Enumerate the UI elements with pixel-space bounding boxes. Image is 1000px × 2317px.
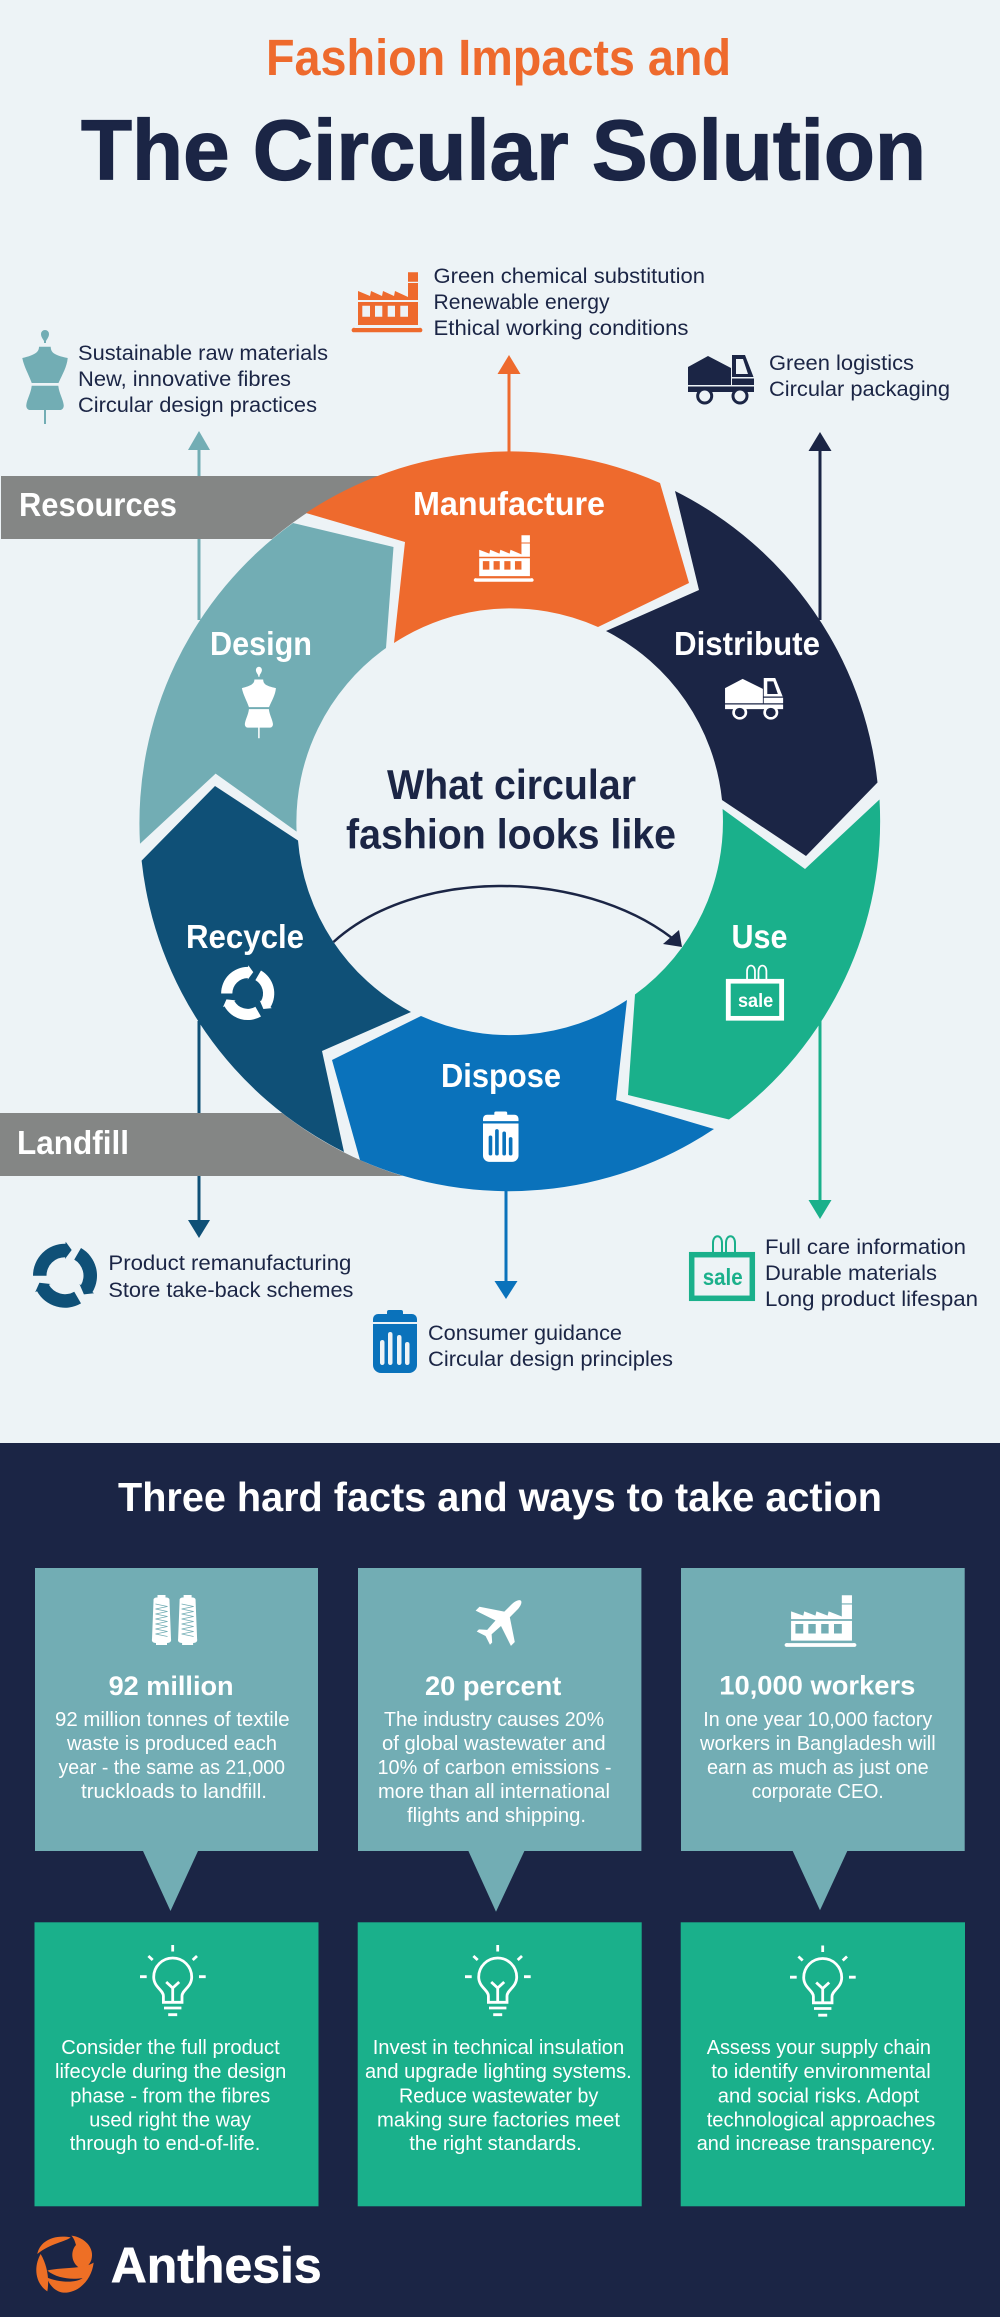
action card 3 <box>681 1922 965 2206</box>
segment: distribute: Distribute <box>674 625 820 662</box>
segment: recycle <box>142 786 411 1152</box>
fact card: 92 million: truckloads to landfill. <box>81 1780 267 1803</box>
segment: design <box>139 523 394 844</box>
fact card: 20 percent: flights and shipping. <box>407 1804 586 1827</box>
landfill bar: Landfill <box>17 1124 129 1161</box>
fact card: 20 percent: 10% of carbon emissions - <box>378 1756 612 1779</box>
fact card: 10,000 workers: workers in Bangladesh will <box>699 1732 936 1755</box>
segment: manufacture: Manufacture <box>413 485 605 522</box>
action card 1: lifecycle during the design <box>55 2060 286 2083</box>
manufacture callout: Ethical working conditions <box>434 317 688 340</box>
action card 2: the right standards. <box>409 2132 582 2155</box>
action card 2: and upgrade lighting systems. <box>365 2060 632 2083</box>
action card 1: Consider the full product <box>61 2036 280 2059</box>
distribute callout: Circular packaging <box>769 378 950 401</box>
fact card: 20 percent <box>358 1568 641 1912</box>
icon: factory <box>785 1595 856 1647</box>
fact card: 20 percent: 20 percent <box>425 1671 561 1701</box>
segment: manufacture <box>306 451 689 643</box>
arrow: recycle down <box>188 1021 210 1238</box>
icon: sale bag: sale <box>703 1264 743 1290</box>
arrow: manufacture up <box>498 355 520 454</box>
segment: dispose <box>332 1000 714 1191</box>
manufacture callout <box>352 265 705 340</box>
action card 3: and increase transparency. <box>697 2132 936 2155</box>
action card 3: and social risks. Adopt <box>718 2084 920 2107</box>
segment: dispose: Dispose <box>441 1057 561 1094</box>
recycle callout <box>32 1242 353 1320</box>
icon: lightbulb <box>140 1945 206 2015</box>
segment: distribute <box>606 491 878 856</box>
panel: hard facts <box>0 1443 1000 2317</box>
action card 3: Assess your supply chain <box>707 2036 931 2059</box>
action card 2: Invest in technical insulation <box>373 2036 624 2059</box>
fact card: 20 percent: of global wastewater and <box>382 1732 606 1755</box>
use callout: Long product lifespan <box>765 1288 978 1311</box>
arrow: use down <box>808 1021 832 1219</box>
action card 1: phase - from the fibres <box>70 2084 270 2107</box>
title: The Circular Solution <box>81 104 926 198</box>
action card 2: making sure factories meet <box>377 2108 620 2131</box>
segment: use <box>628 800 880 1120</box>
logo: anthesis: Anthesis <box>111 2236 322 2293</box>
fact card: 20 percent: The industry causes 20% <box>384 1708 604 1731</box>
use callout <box>692 1236 978 1311</box>
dispose callout <box>373 1310 673 1373</box>
icon: mannequin <box>22 330 68 424</box>
resources bar <box>1 476 379 539</box>
icon: leaf swirl <box>36 2236 94 2293</box>
design callout: New, innovative fibres <box>78 368 291 391</box>
recycle callout: Product remanufacturing <box>108 1252 351 1275</box>
fact card: 92 million: waste is produced each <box>66 1732 277 1755</box>
action card 3: technological approaches <box>707 2108 935 2131</box>
landfill bar <box>0 1113 403 1176</box>
distribute callout <box>688 352 950 403</box>
centre heading: What circular <box>387 761 636 808</box>
action card 1: through to end-of-life. <box>70 2132 260 2155</box>
action card 1: used right the way <box>89 2108 252 2131</box>
fact card: 10,000 workers: In one year 10,000 factory <box>703 1708 933 1731</box>
fact card: 10,000 workers: 10,000 workers <box>719 1670 915 1700</box>
distribute callout: Green logistics <box>769 352 914 375</box>
design callout: Circular design practices <box>78 394 317 417</box>
icon: truck <box>688 355 754 403</box>
icon: recycle <box>32 1242 110 1320</box>
fact card: 20 percent: more than all international <box>378 1780 610 1803</box>
centre heading: fashion looks like <box>346 811 676 858</box>
icon: lightbulb <box>465 1945 531 2015</box>
recycle callout: Store take-back schemes <box>108 1279 353 1302</box>
segment: design: Design <box>210 625 312 662</box>
use callout: Durable materials <box>765 1262 937 1285</box>
segment: use: sale <box>738 990 773 1012</box>
heading: three hard facts: Three hard facts and ways to take action <box>118 1474 882 1520</box>
arrow: dispose down <box>494 1190 518 1299</box>
segment: use: Use <box>732 918 788 955</box>
action card 3: to identify environmental <box>711 2060 931 2083</box>
icon: bin <box>373 1310 417 1373</box>
action card 2: Reduce wastewater by <box>399 2084 599 2107</box>
fact card: 92 million: 92 million tonnes of textile <box>55 1708 290 1731</box>
action card 2 <box>358 1922 642 2206</box>
arrow: recycle to use loop <box>334 886 682 947</box>
dispose callout: Circular design principles <box>428 1348 673 1371</box>
icon: thread spools <box>152 1595 197 1645</box>
fact card: 92 million: year - the same as 21,000 <box>58 1756 285 1779</box>
manufacture callout: Renewable energy <box>434 291 610 314</box>
dispose callout: Consumer guidance <box>428 1322 622 1345</box>
segment: recycle: Recycle <box>186 918 304 955</box>
use callout: Full care information <box>765 1236 966 1259</box>
icon: factory <box>352 272 422 332</box>
resources bar: Resources <box>19 486 177 523</box>
panel: circular ring <box>139 451 880 1191</box>
fact card: 92 million: 92 million <box>109 1671 234 1701</box>
fact card: 92 million <box>35 1568 318 1911</box>
title: Fashion Impacts and <box>266 29 731 86</box>
fact card: 10,000 workers: earn as much as just one <box>707 1756 929 1779</box>
action card 1 <box>34 1922 318 2206</box>
centre heading <box>346 761 676 858</box>
title <box>81 29 926 198</box>
fact card: 10,000 workers: corporate CEO. <box>752 1780 884 1803</box>
icon: lightbulb <box>790 1946 856 2015</box>
design callout: Sustainable raw materials <box>78 342 328 365</box>
icon: sale bag <box>692 1236 752 1298</box>
manufacture callout: Green chemical substitution <box>434 265 705 288</box>
arrow: distribute up <box>808 432 832 620</box>
arrow: design to resources <box>188 431 210 620</box>
icon: plane <box>466 1583 539 1656</box>
fact card: 10,000 workers <box>681 1568 965 1910</box>
design callout <box>22 330 328 424</box>
